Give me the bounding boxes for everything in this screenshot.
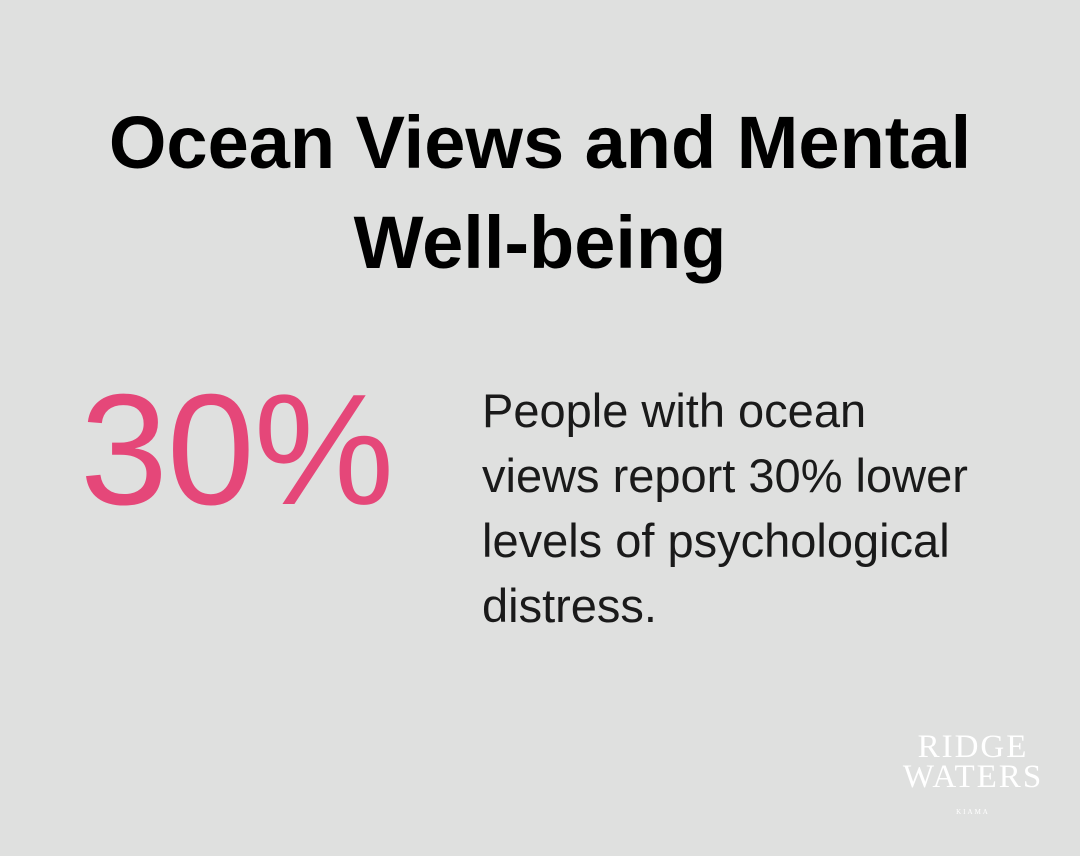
description: distress. — [482, 579, 657, 632]
title — [109, 101, 971, 284]
description: People with ocean — [482, 384, 866, 437]
logo: WATERS — [903, 759, 1043, 795]
title: Ocean Views and Mental — [109, 101, 971, 184]
logo: KIAMA — [956, 808, 990, 816]
title: Well-being — [354, 201, 726, 284]
logo — [903, 729, 1043, 816]
description: levels of psychological — [482, 514, 950, 567]
description: views report 30% lower — [482, 449, 968, 502]
description — [482, 384, 968, 632]
logo: RIDGE — [918, 729, 1028, 765]
stat number: 30% — [80, 362, 393, 538]
